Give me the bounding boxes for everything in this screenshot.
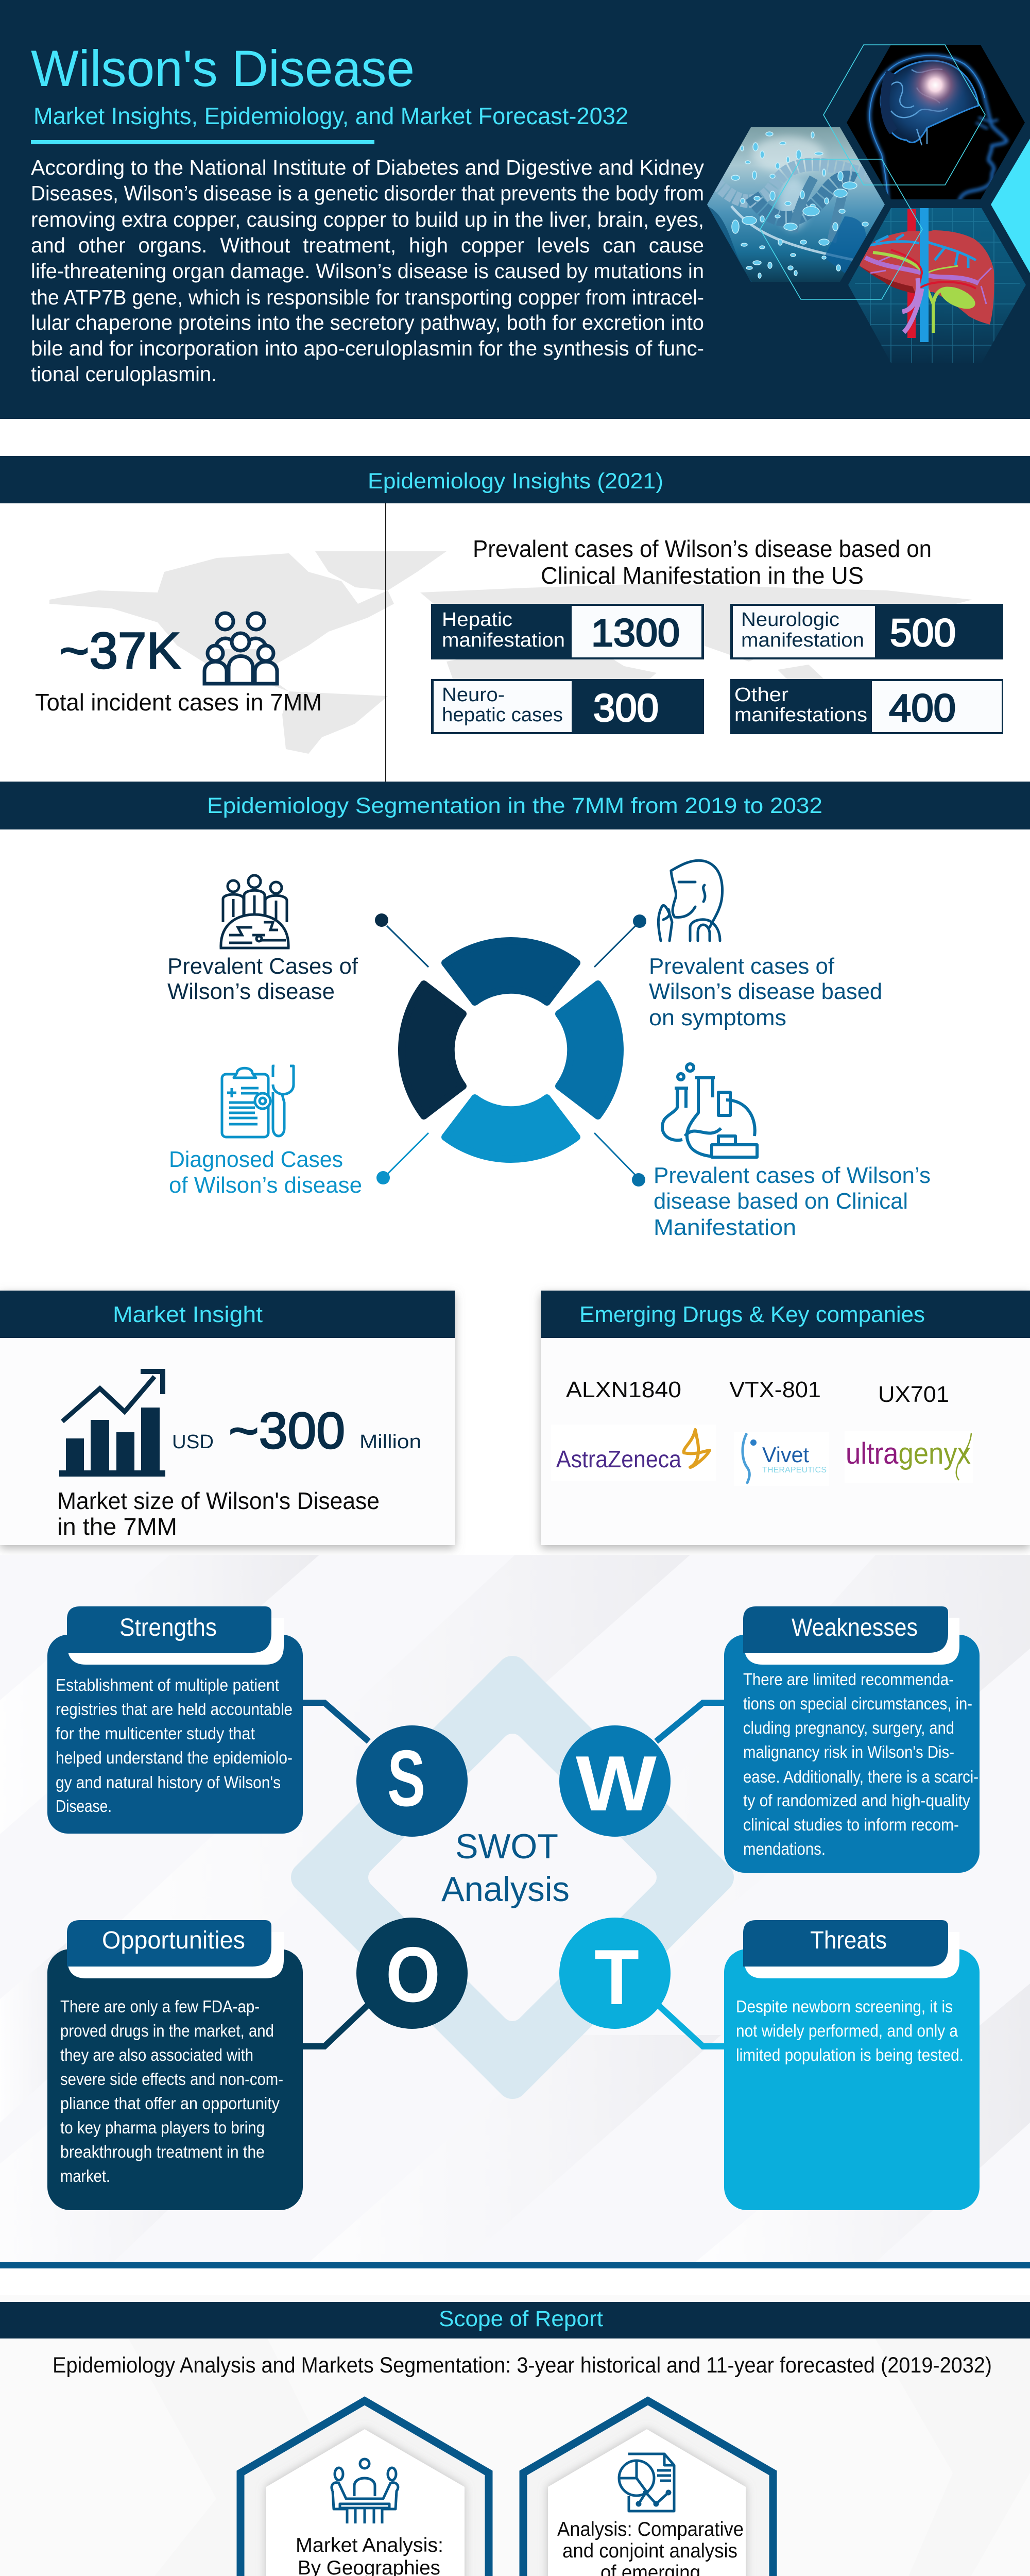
intro paragraph bbox=[31, 156, 704, 386]
connector bottom-right bbox=[594, 1133, 645, 1187]
connector O bbox=[303, 2004, 369, 2046]
logo: ultragenyx bbox=[845, 1431, 973, 1483]
panel: market insight bbox=[0, 1291, 455, 1545]
text: and conjoint analysis bbox=[562, 2540, 737, 2562]
label: diagnosed cases: of Wilson’s disease bbox=[169, 1173, 362, 1198]
panel: market insight: Market size of Wilson's Disease bbox=[57, 1487, 380, 1514]
logo: ultragenyx: ultragenyx bbox=[846, 1437, 971, 1470]
stat box: neurologic bbox=[730, 604, 1003, 659]
strengths text: for the multicenter study that bbox=[56, 1724, 255, 1743]
section band: Epidemiology Insights: Epidemiology Insights (2021) bbox=[368, 469, 663, 494]
divider bbox=[385, 503, 386, 782]
panel: emerging drugs bbox=[541, 1291, 1030, 1545]
card: Strengths bbox=[47, 1606, 303, 1834]
label: clinical manifestation: Prevalent cases of Wilson’s bbox=[654, 1163, 931, 1188]
circle O: O bbox=[386, 1931, 440, 2019]
opportunities text: pliance that offer an opportunity bbox=[60, 2094, 280, 2113]
icon: people group bbox=[204, 613, 277, 684]
label: prevalent cases: Prevalent Cases of bbox=[167, 954, 358, 979]
card: Opportunities: Opportunities bbox=[102, 1927, 245, 1954]
weaknesses text bbox=[743, 1670, 978, 1858]
subtitle: Market Insights, Epidemiology, and Market Forecast-2032 bbox=[33, 103, 628, 129]
opportunities text: severe side effects and non-com- bbox=[60, 2070, 283, 2089]
stat box: neuro-hepatic: hepatic cases bbox=[442, 704, 563, 726]
icon: growth chart bbox=[59, 1369, 165, 1477]
opportunities text: breakthrough treatment in the bbox=[60, 2142, 265, 2161]
logo: Vivet: THERAPEUTICS bbox=[762, 1466, 827, 1475]
opportunities text: they are also associated with bbox=[60, 2045, 253, 2064]
label: prevalent cases bbox=[167, 954, 358, 1004]
weaknesses text: There are limited recommenda- bbox=[743, 1670, 954, 1689]
text: Market Analysis: bbox=[296, 2534, 443, 2556]
SWOT centre label bbox=[441, 1827, 570, 1909]
intro paragraph: lular chaperone proteins into the secretory pathway, both for excretion into bbox=[31, 311, 704, 334]
logo: Vivet: Vivet bbox=[762, 1443, 809, 1467]
connector T bbox=[657, 2004, 724, 2046]
card: Opportunities bbox=[47, 1920, 303, 2210]
stat box: neuro-hepatic bbox=[431, 679, 704, 734]
panel: emerging drugs: VTX-801 bbox=[729, 1377, 821, 1402]
panel: market insight: in the 7MM bbox=[57, 1513, 177, 1540]
panel: market insight: Million bbox=[359, 1431, 421, 1453]
weaknesses text: ty of randomized and high-quality bbox=[743, 1791, 970, 1810]
icon: people on globe bbox=[221, 875, 288, 948]
card: Weaknesses bbox=[724, 1606, 980, 1873]
circle S bbox=[356, 1725, 468, 1837]
circle T bbox=[559, 1918, 671, 2029]
connector top-right bbox=[594, 914, 646, 967]
text bbox=[557, 2518, 744, 2576]
circle W bbox=[559, 1725, 671, 1837]
weaknesses text: ease. Additionally, there is a scarci- bbox=[743, 1767, 978, 1786]
opportunities text: to key pharma players to bring bbox=[60, 2118, 265, 2137]
section band: Scope of Report: Scope of Report bbox=[439, 2307, 603, 2331]
image: cells hexagon bbox=[706, 126, 886, 283]
opportunities text bbox=[60, 1997, 283, 2185]
stat box: hepatic: Hepatic bbox=[442, 609, 512, 631]
card: Strengths: Strengths bbox=[119, 1614, 217, 1641]
weaknesses text: clinical studies to inform recom- bbox=[743, 1815, 959, 1834]
stat box: other: Other bbox=[734, 684, 788, 706]
outline hexagon A bbox=[823, 45, 985, 185]
weaknesses text: cluding pregnancy, surgery, and bbox=[743, 1718, 954, 1737]
label: symptoms bbox=[649, 954, 882, 1030]
intro paragraph: Diseases, Wilson’s disease is a genetic disorder that prevents the body from bbox=[31, 181, 704, 205]
image: brain hexagon bbox=[845, 41, 1030, 202]
label: symptoms: Wilson’s disease based bbox=[649, 979, 882, 1004]
donut ring diagram bbox=[402, 941, 620, 1159]
icon: meeting bbox=[332, 2459, 398, 2523]
opportunities text: proved drugs in the market, and bbox=[60, 2021, 274, 2040]
section band: Scope of Report bbox=[0, 2302, 1030, 2338]
connector W bbox=[656, 1703, 724, 1741]
scope background bbox=[0, 2295, 1030, 2576]
threats text: Despite newborn screening, it is bbox=[736, 1997, 953, 2016]
circle S: S bbox=[387, 1734, 425, 1823]
label: clinical manifestation: disease based on Clinical bbox=[654, 1189, 908, 1214]
panel: emerging drugs: Emerging Drugs & Key companies bbox=[579, 1302, 925, 1327]
icon: coughing man bbox=[658, 860, 723, 941]
intro paragraph: bile and for incorporation into apo-ceruloplasmin for the synthesis of func- bbox=[31, 336, 704, 360]
intro paragraph: and other organs. Without treatment, high copper levels can cause bbox=[31, 233, 704, 257]
threats text: limited population is being tested. bbox=[736, 2045, 964, 2064]
stat: total incident cases: Total incident cases in 7MM bbox=[35, 689, 322, 716]
circle W: W bbox=[576, 1740, 657, 1827]
hexagon: analysis bbox=[523, 2401, 773, 2576]
opportunities text: market. bbox=[60, 2166, 110, 2185]
strengths text bbox=[56, 1675, 293, 1816]
intro paragraph: the ATP7B gene, which is responsible for transporting copper from intracel- bbox=[31, 285, 704, 309]
header panel bbox=[0, 0, 1030, 419]
connector bottom-left bbox=[376, 1133, 428, 1184]
intro paragraph: removing extra copper, causing copper to build up in the liver, brain, eyes, bbox=[31, 208, 704, 231]
stat box: other: 400 bbox=[889, 686, 956, 730]
heading: prevalent cases by clinical manifestation: Clinical Manifestation in the US bbox=[541, 562, 864, 589]
decorative cyan hexagon bbox=[991, 139, 1030, 273]
section band: Epidemiology Segmentation bbox=[0, 782, 1030, 829]
subtitle underline bbox=[31, 140, 374, 144]
SWOT centre label: Analysis bbox=[441, 1870, 570, 1909]
stat box: neuro-hepatic: Neuro- bbox=[442, 684, 505, 706]
heading: prevalent cases by clinical manifestation bbox=[473, 535, 932, 589]
threats text bbox=[736, 1997, 964, 2064]
circle T: T bbox=[594, 1934, 639, 2021]
outline hexagon B bbox=[760, 159, 922, 299]
section band: Epidemiology Insights bbox=[0, 456, 1030, 503]
SWOT diamond bbox=[306, 1671, 718, 2083]
panel: market insight: USD bbox=[172, 1431, 214, 1453]
connector S bbox=[303, 1703, 369, 1741]
SWOT centre label: SWOT bbox=[455, 1827, 558, 1866]
intro paragraph: tional ceruloplasmin. bbox=[31, 362, 217, 386]
stat box: neurologic: Neurologic bbox=[741, 609, 839, 631]
strengths text: helped understand the epidemiolo- bbox=[56, 1748, 293, 1767]
stat box: neuro-hepatic: 300 bbox=[593, 686, 659, 730]
stat box: neurologic: manifestation bbox=[741, 630, 864, 651]
text: Analysis: Comparative bbox=[557, 2518, 744, 2540]
title: Wilson's Disease bbox=[31, 40, 415, 97]
strengths text: registries that are held accountable bbox=[56, 1700, 293, 1719]
opportunities text: There are only a few FDA-ap- bbox=[60, 1997, 260, 2016]
strengths text: Establishment of multiple patient bbox=[56, 1675, 279, 1694]
world map background bbox=[49, 551, 972, 754]
SWOT background bbox=[0, 1555, 1030, 2268]
label: diagnosed cases: Diagnosed Cases bbox=[169, 1147, 343, 1172]
label: symptoms: on symptoms bbox=[649, 1005, 786, 1030]
logo: AstraZeneca bbox=[551, 1425, 716, 1481]
icon: document with charts bbox=[619, 2454, 674, 2511]
heading: prevalent cases by clinical manifestation: Prevalent cases of Wilson’s disease based on bbox=[473, 535, 932, 562]
panel: emerging drugs: UX701 bbox=[878, 1382, 949, 1407]
hexagon: market analysis bbox=[241, 2401, 489, 2576]
text bbox=[296, 2534, 443, 2576]
icon: clipboard and stethoscope bbox=[222, 1066, 294, 1137]
label: clinical manifestation bbox=[654, 1163, 931, 1240]
label: diagnosed cases bbox=[169, 1147, 362, 1198]
stat box: hepatic bbox=[431, 604, 704, 659]
stat box: other bbox=[730, 679, 1003, 734]
stat box: hepatic: 1300 bbox=[591, 611, 680, 654]
strengths text: gy and natural history of Wilson's bbox=[56, 1773, 281, 1792]
panel: market insight: ~300 bbox=[229, 1402, 345, 1459]
weaknesses text: mendations. bbox=[743, 1839, 826, 1858]
strengths text: Disease. bbox=[56, 1797, 112, 1816]
logo: Vivet bbox=[734, 1432, 829, 1486]
intro paragraph: life-threatening organ damage. Wilson’s disease is caused by mutations in bbox=[31, 259, 704, 283]
stat box: neurologic: 500 bbox=[890, 611, 956, 654]
connector top-left bbox=[375, 913, 428, 967]
stat: total incident cases bbox=[35, 613, 322, 716]
intro paragraph: According to the National Institute of Diabetes and Digestive and Kidney bbox=[31, 156, 704, 179]
panel: emerging drugs: ALXN1840 bbox=[566, 1377, 681, 1402]
stat box: hepatic: manifestation bbox=[442, 630, 565, 651]
card: Weaknesses: Weaknesses bbox=[792, 1614, 918, 1641]
image: liver hexagon bbox=[845, 206, 1030, 366]
icon: lab flasks bbox=[662, 1064, 757, 1157]
card: Threats bbox=[724, 1920, 980, 2210]
weaknesses text: malignancy risk in Wilson's Dis- bbox=[743, 1742, 954, 1761]
label: clinical manifestation: Manifestation bbox=[654, 1215, 796, 1240]
panel: market insight: Market Insight bbox=[113, 1302, 263, 1327]
section band: Epidemiology Segmentation: Epidemiology Segmentation in the 7MM from 2019 to 2032 bbox=[207, 793, 822, 818]
stat: total incident cases: ~37K bbox=[59, 622, 181, 679]
stat box: other: manifestations bbox=[734, 704, 867, 726]
weaknesses text: tions on special circumstances, in- bbox=[743, 1694, 972, 1713]
label: prevalent cases: Wilson’s disease bbox=[167, 979, 335, 1004]
circle O bbox=[356, 1918, 468, 2029]
label: symptoms: Prevalent cases of bbox=[649, 954, 835, 979]
card: Threats: Threats bbox=[810, 1927, 887, 1954]
logo: AstraZeneca: AstraZeneca bbox=[556, 1446, 681, 1472]
threats text: not widely performed, and only a bbox=[736, 2021, 958, 2040]
